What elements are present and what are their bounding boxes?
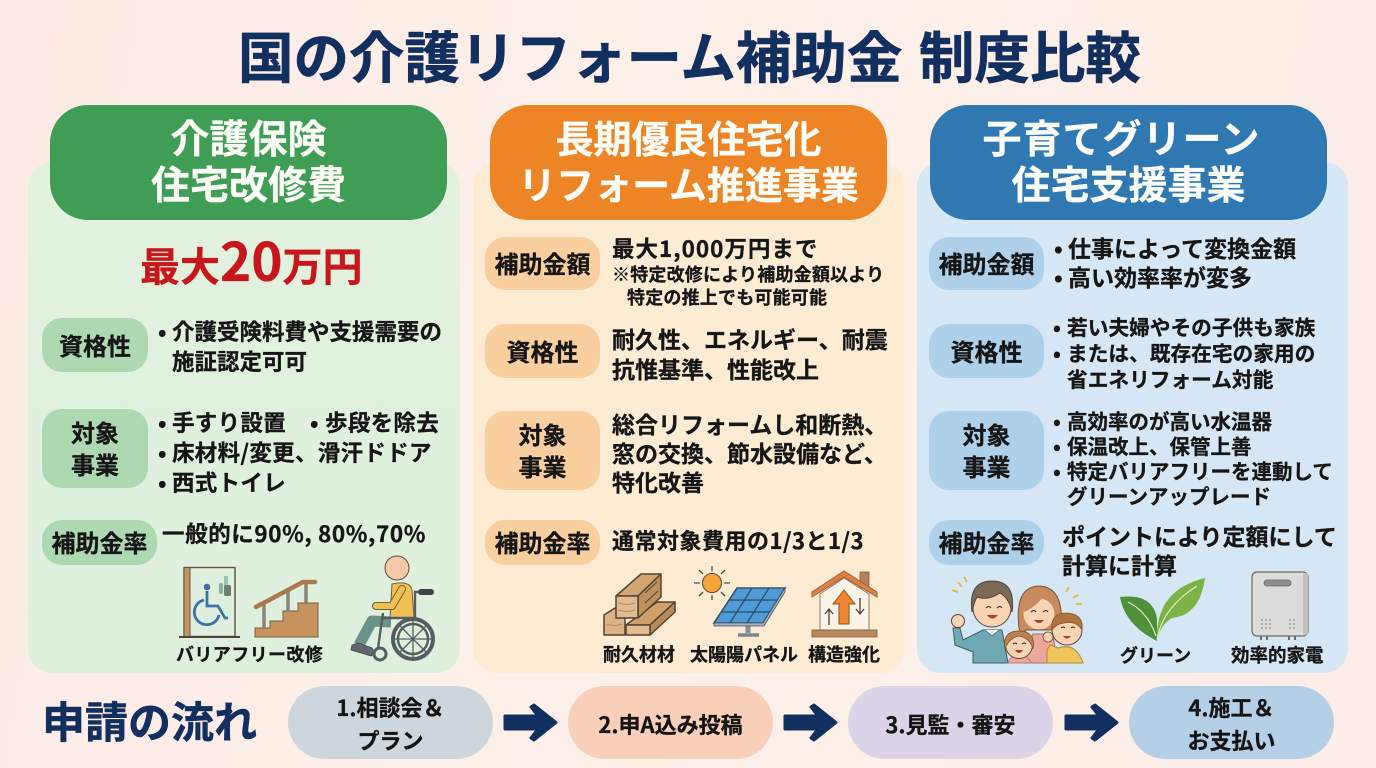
label: 補助金率: 補助金率 (494, 524, 590, 559)
caption: バリアフリー改修: バリアフリー改修 (176, 641, 323, 667)
label: 補助金額 (485, 237, 600, 290)
text: target works: 総合リフォームし和断熱、 (612, 406, 887, 440)
heading: 申請の流れ: 申請の流れ (42, 689, 257, 751)
label: 補助金額: 補助金額 (494, 245, 590, 280)
label: 資格性 (42, 318, 148, 372)
step 1: 1.相談会＆ (336, 691, 445, 723)
label: 資格性 (485, 324, 600, 378)
heading: 介護保険住宅改修費: 介護保険 (170, 109, 326, 165)
text: eligibility (158, 315, 442, 377)
text: subsidy rate: 一般的に90%, 80%,70% (162, 517, 426, 549)
text: subsidy amount note: ※特定改修により補助金額以より (612, 261, 884, 287)
label: 資格性: 資格性 (59, 326, 131, 362)
text: subsidy rate: 計算に計算 (1062, 547, 1177, 581)
heading: 子育てグリーン住宅支援事業: 住宅支援事業 (1011, 155, 1246, 211)
text: subsidy rate: 通常対象費用の1/3と1/3 (612, 524, 864, 556)
label: 補助金率: 補助金率 (938, 524, 1034, 559)
text: eligibility: 耐久性、エネルギー、耐震 (612, 321, 888, 355)
text: • (1053, 311, 1061, 341)
text: • (158, 436, 167, 468)
step 4: お支払い (1187, 724, 1276, 756)
label: 補助金率 (485, 520, 600, 565)
text: • (1054, 230, 1063, 264)
text: target works: 西式トイレ (172, 466, 286, 498)
text: target works (1053, 405, 1333, 510)
heading: 長期優良住宅化リフォーム推進事業: リフォーム推進事業 (518, 155, 859, 210)
text: target works: • (310, 406, 319, 438)
icon: lumber (603, 573, 676, 636)
text: • (1053, 430, 1061, 460)
text: • (1054, 259, 1063, 293)
text: subsidy amount: 高い効率率が変多 (1068, 259, 1252, 293)
text: target works: 手すり設置 歩段を除去 (172, 406, 439, 438)
icon: barrier-free door (179, 566, 240, 638)
text: • (158, 466, 167, 498)
text: eligibility: 抗惟基準、性能改上 (612, 351, 819, 385)
text: • (158, 406, 167, 438)
text: target works: 特定バリアフリーを連動して (1067, 455, 1333, 485)
step 1: プラン (357, 724, 424, 756)
step 4 (1129, 686, 1334, 759)
caption: 太陽陽パネル: 太陽陽パネル (690, 641, 798, 667)
text: subsidy rate: ポイントにより定額にして (1062, 518, 1337, 552)
arrow (504, 704, 558, 742)
step 2 (568, 686, 773, 759)
caption: 効率的家電: 効率的家電 (1231, 642, 1324, 668)
step 1 (288, 686, 493, 759)
label: 対象事業: 事業 (962, 448, 1010, 483)
label: 資格性 (929, 324, 1044, 378)
heading: 子育てグリーン住宅支援事業: 子育てグリーン (982, 109, 1261, 165)
step 4: 4.施工＆ (1188, 691, 1275, 723)
text: target works: 特化改善 (612, 464, 704, 498)
label: 対象事業 (929, 411, 1044, 490)
text: • (1053, 337, 1061, 367)
label: 対象事業: 対象 (518, 416, 566, 451)
icon: stairs with handrail (254, 580, 318, 638)
text: target works (158, 406, 439, 498)
caption: グリーン: グリーン (1120, 642, 1191, 668)
label: 対象事業 (485, 411, 600, 490)
heading: 長期優良住宅化リフォーム推進事業 (490, 105, 887, 220)
label: 補助金額 (929, 237, 1044, 290)
text: • (1053, 405, 1061, 435)
maximum amount: 最大20万円: 最大20万円 (140, 221, 363, 297)
panel: 長期優良住宅化リフォーム推進事業 (473, 162, 904, 673)
text: target works: 窓の交換、節水設備など、 (612, 435, 887, 469)
panel: 介護保険住宅改修費 (28, 162, 460, 673)
arrow (1064, 704, 1119, 742)
text: eligibility: または、既存在宅の家用の (1067, 337, 1315, 367)
arrow (784, 704, 838, 742)
step 2: 2.申A込み投稿 (598, 708, 743, 740)
icon: person in wheelchair (350, 556, 435, 662)
label: 対象事業: 対象 (962, 416, 1010, 451)
icon: reinforced house (812, 570, 878, 638)
text: subsidy rate (1062, 518, 1337, 581)
text: subsidy amount (1054, 230, 1296, 293)
text: eligibility (1053, 311, 1316, 393)
panel: 子育てグリーン住宅支援事業 (917, 162, 1348, 673)
text: eligibility: 省エネリフォーム対能 (1067, 363, 1273, 393)
heading: 長期優良住宅化リフォーム推進事業: 長期優良住宅化 (555, 109, 822, 164)
caption: 耐久材材: 耐久材材 (603, 641, 675, 667)
text: subsidy amount: 仕事によって変換金額 (1068, 230, 1296, 264)
label: 補助金率 (42, 520, 157, 565)
heading: 介護保険住宅改修費 (50, 105, 447, 220)
step 3 (848, 686, 1053, 759)
label: 資格性: 資格性 (506, 332, 578, 368)
text: • (1053, 455, 1061, 485)
text: target works: 高効率のが高い水温器 (1067, 405, 1272, 435)
text: target works: 保温改上、保管上善 (1067, 430, 1252, 460)
text: target works: 床材料/変更、滑汗ドドア (172, 436, 432, 468)
label: 対象事業 (42, 409, 148, 488)
label: 補助金額: 補助金額 (938, 245, 1034, 280)
icon: solar panel and sun (694, 566, 786, 637)
text: eligibility: 施証認定可可 (172, 345, 307, 377)
text: • (158, 315, 167, 347)
text: target works (612, 406, 887, 498)
label: 対象事業: 対象 (71, 414, 119, 449)
label: 資格性: 資格性 (950, 332, 1022, 368)
label: 補助金率 (929, 520, 1044, 565)
icon: green leaves (1120, 578, 1205, 641)
caption: 構造強化: 構造強化 (808, 641, 880, 667)
icon: high-efficiency water heater (1251, 571, 1309, 640)
text: eligibility: 介護受険料費や支援需要の (172, 315, 442, 347)
icon: family (951, 576, 1084, 664)
label: 対象事業: 事業 (518, 448, 566, 483)
heading: 介護保険住宅改修費: 住宅改修費 (151, 155, 346, 211)
text: eligibility: 若い夫婦やその子供も家族 (1067, 311, 1315, 341)
text: target works: グリーンアップレード (1067, 480, 1271, 510)
heading: 子育てグリーン住宅支援事業 (930, 105, 1327, 220)
label: 補助金率: 補助金率 (52, 524, 148, 559)
text: subsidy amount note (612, 261, 884, 310)
step 3: 3.見監・審安 (885, 708, 1016, 740)
text: subsidy amount: 最大1,000万円まで (612, 232, 818, 264)
label: 対象事業: 事業 (71, 446, 119, 481)
text: subsidy amount note: 特定の推上でも可能可能 (627, 284, 827, 310)
text: eligibility (612, 321, 888, 385)
title: 国の介護リフォーム補助金 制度比較 (238, 14, 1141, 94)
